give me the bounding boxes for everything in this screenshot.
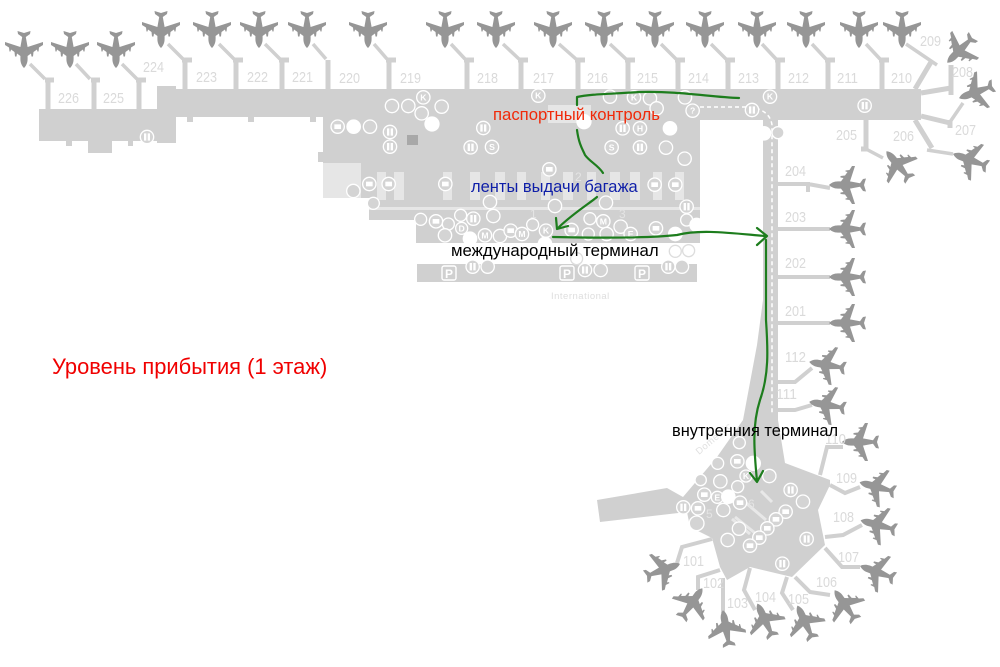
icons: pier [745,90,871,141]
gate labels: 111 [776,386,797,403]
small zone numbers: 5 [706,507,713,521]
small zone numbers: 1 [530,207,537,221]
gate labels: 222 [247,69,268,86]
gate labels: 109 [836,470,857,487]
gate labels: 215 [637,70,658,87]
icon: restroom west [140,130,154,144]
gate labels: 203 [785,209,806,226]
green route from passport control to baggage [553,92,767,482]
parking strip [417,264,697,282]
gate labels: 204 [785,163,806,180]
jet bridges [30,44,963,613]
gate labels: 103 [727,595,748,612]
icons: domestic terminal [677,437,813,570]
gate labels: 108 [833,509,854,526]
dashed walkway [700,107,772,415]
gate labels: 217 [533,70,554,87]
gate labels: 211 [837,70,858,87]
label: international terminal: международный терминал [451,241,659,260]
gate labels: 216 [587,70,608,87]
airport arrivals level map: P [563,267,571,281]
gate labels: 112 [785,349,806,366]
gate labels [58,33,976,612]
gate labels: 218 [477,70,498,87]
building: terminal floor plan [39,86,921,580]
gate labels: 206 [893,128,914,145]
icons: international terminal: K [543,226,550,236]
icons: international terminal: S [609,142,615,152]
gate labels: 207 [955,122,976,139]
icons: international terminal: M [518,229,526,239]
parking signs [442,266,649,280]
airport arrivals level map: P [638,267,646,281]
gate labels: 226 [58,90,79,107]
icons: international terminal: H [637,123,643,133]
gate labels: 102 [703,575,724,592]
dark square marker [407,135,418,145]
small zone numbers: 6 [748,497,755,511]
domestic belts [732,491,772,534]
green route to domestic terminal [553,228,767,245]
title: Уровень прибытия (1 этаж) [52,354,327,379]
gate labels: 220 [339,70,360,87]
icons: international terminal: K [631,92,638,102]
gate labels: 201 [785,303,806,320]
gate labels: 210 [891,70,912,87]
gate labels: 221 [292,69,313,86]
gate labels: 101 [683,553,704,570]
gate labels: 209 [920,33,941,50]
gate labels: 110 [825,431,846,448]
icons: international terminal: M [600,216,607,226]
icons: international terminal: K [535,91,542,101]
icons: pier: K [767,92,774,102]
gate labels: 205 [836,127,857,144]
icons: domestic terminal: E [714,492,720,502]
gate labels: 213 [738,70,759,87]
icons: domestic terminal: K [743,471,750,481]
small zone numbers: 2 [575,170,582,184]
label: domestic terminal: внутренния терминал [672,422,838,440]
gate labels: 106 [816,574,837,591]
lighter zones and baggage belts [323,105,700,210]
label: International: International [551,291,610,302]
icons: international terminal: ? [690,106,695,116]
gate labels: 202 [785,255,806,272]
gate labels: 104 [755,589,776,606]
icons: international terminal: E [628,229,634,239]
gate labels: 225 [103,90,124,107]
gate labels: 107 [838,549,859,566]
icons: international terminal: M [481,230,489,240]
gate labels: 212 [788,70,809,87]
gate labels: 214 [688,70,709,87]
gate labels: 219 [400,70,421,87]
small zone numbers: 3 [619,207,626,221]
icons: international terminal: S [489,142,495,152]
icons: international terminal [331,89,704,277]
icons: international terminal: K [420,92,427,102]
gate labels: 223 [196,69,217,86]
small zone numbers [530,170,755,521]
gate labels: 105 [788,591,809,608]
airport arrivals level map: P [445,267,453,281]
label: baggage belts: ленты выдачи багажа [471,178,638,196]
gate labels: 208 [952,64,973,81]
icons: international terminal: D [459,223,465,233]
west concourse [39,86,921,580]
label: Domestic: Domestic [694,421,734,457]
gate labels: 224 [143,59,164,76]
label: passport control: паспортный контроль [493,105,660,124]
